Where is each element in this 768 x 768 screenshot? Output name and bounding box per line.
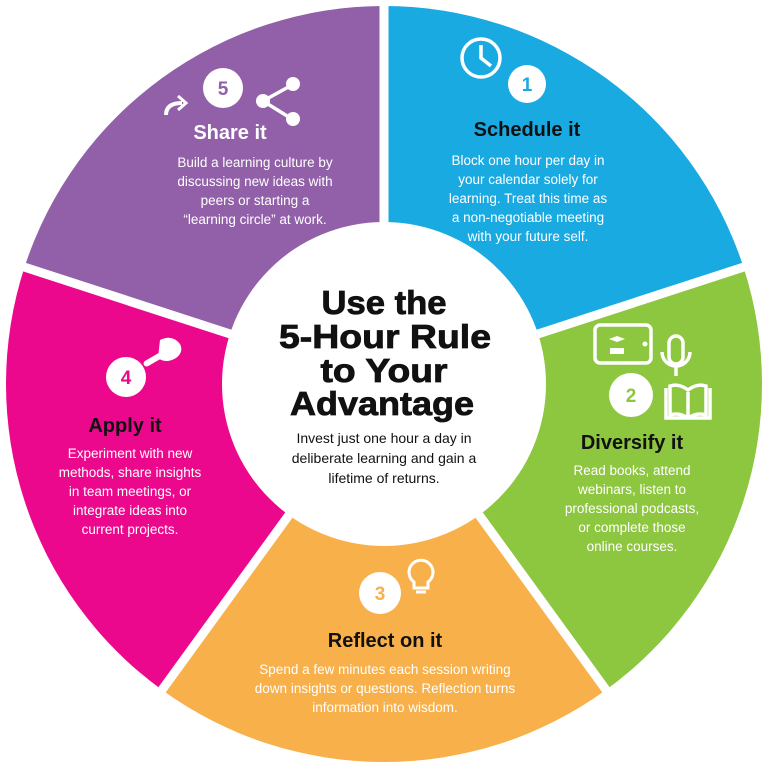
number 1: 1 [522,75,533,96]
text: schedule body: Block one hour per day in [451,153,605,168]
number 1 [508,65,546,103]
number 4: 4 [121,368,132,389]
icon: book [666,385,710,418]
subtitle: Invest just one hour a day in [296,430,472,446]
text: reflect body: down insights or questions. Reflection turns [255,681,515,696]
text: diversify body: webinars, listen to [577,482,686,497]
icon: microphone [662,336,690,376]
title: to Your [320,352,448,389]
text: share body: discussing new ideas with [177,174,333,189]
text: schedule body: your calendar solely for [458,172,598,187]
number 2: 2 [626,386,636,407]
icon: hand pointing [142,338,181,368]
text: reflect body: Spend a few minutes each session writing [259,662,511,677]
panel: schedule it (blue) [384,6,744,384]
text: diversify body: or complete those [578,520,686,535]
heading: Diversify it: Diversify it [581,432,683,454]
number 3 [359,572,401,614]
text: apply body: in team meetings, or [69,484,192,499]
title: Use the [322,284,446,321]
icon: tablet [595,325,651,363]
text: schedule body: learning. Treat this time as [449,191,607,206]
subtitle: lifetime of returns. [328,470,440,486]
panel: diversify it (green) [384,267,762,690]
text: schedule body: with your future self. [467,229,588,244]
title: Advantage [290,385,474,422]
subtitle: deliberate learning and gain a [292,450,476,466]
text: share body: Build a learning culture by [177,155,333,170]
number 5: 5 [218,79,229,100]
text: share body: “learning circle” at work. [183,212,327,227]
number 5 [203,68,243,108]
text: reflect body: information into wisdom. [312,700,458,715]
icon: arrow [166,96,186,115]
heading: Share it: Share it [193,122,267,144]
panel: share it (purple) [24,6,384,384]
icon: light bulb [409,560,433,592]
number 4 [106,357,146,397]
heading: Schedule it: Schedule it [474,119,581,141]
text: apply body: Experiment with new [68,446,193,461]
text: share body: peers or starting a [201,193,310,208]
center circle [222,222,546,546]
heading: Reflect on it: Reflect on it [328,630,443,652]
text: apply body: methods, share insights [59,465,202,480]
panel: apply it (pink) [6,267,384,690]
title: 5-Hour Rule [279,318,491,355]
panel: reflect on it (orange) [162,384,606,762]
text: apply body: integrate ideas into [73,503,187,518]
text: diversify body: Read books, attend [573,463,691,478]
text: diversify body: online courses. [587,539,677,554]
number 2 [609,373,653,417]
number 3: 3 [375,584,385,605]
text: schedule body: a non-negotiable meeting [452,210,604,225]
icon: clock [462,39,500,77]
icon: share [256,77,300,126]
heading: Apply it: Apply it [88,415,162,437]
text: diversify body: professional podcasts, [565,501,699,516]
text: apply body: current projects. [82,522,178,537]
